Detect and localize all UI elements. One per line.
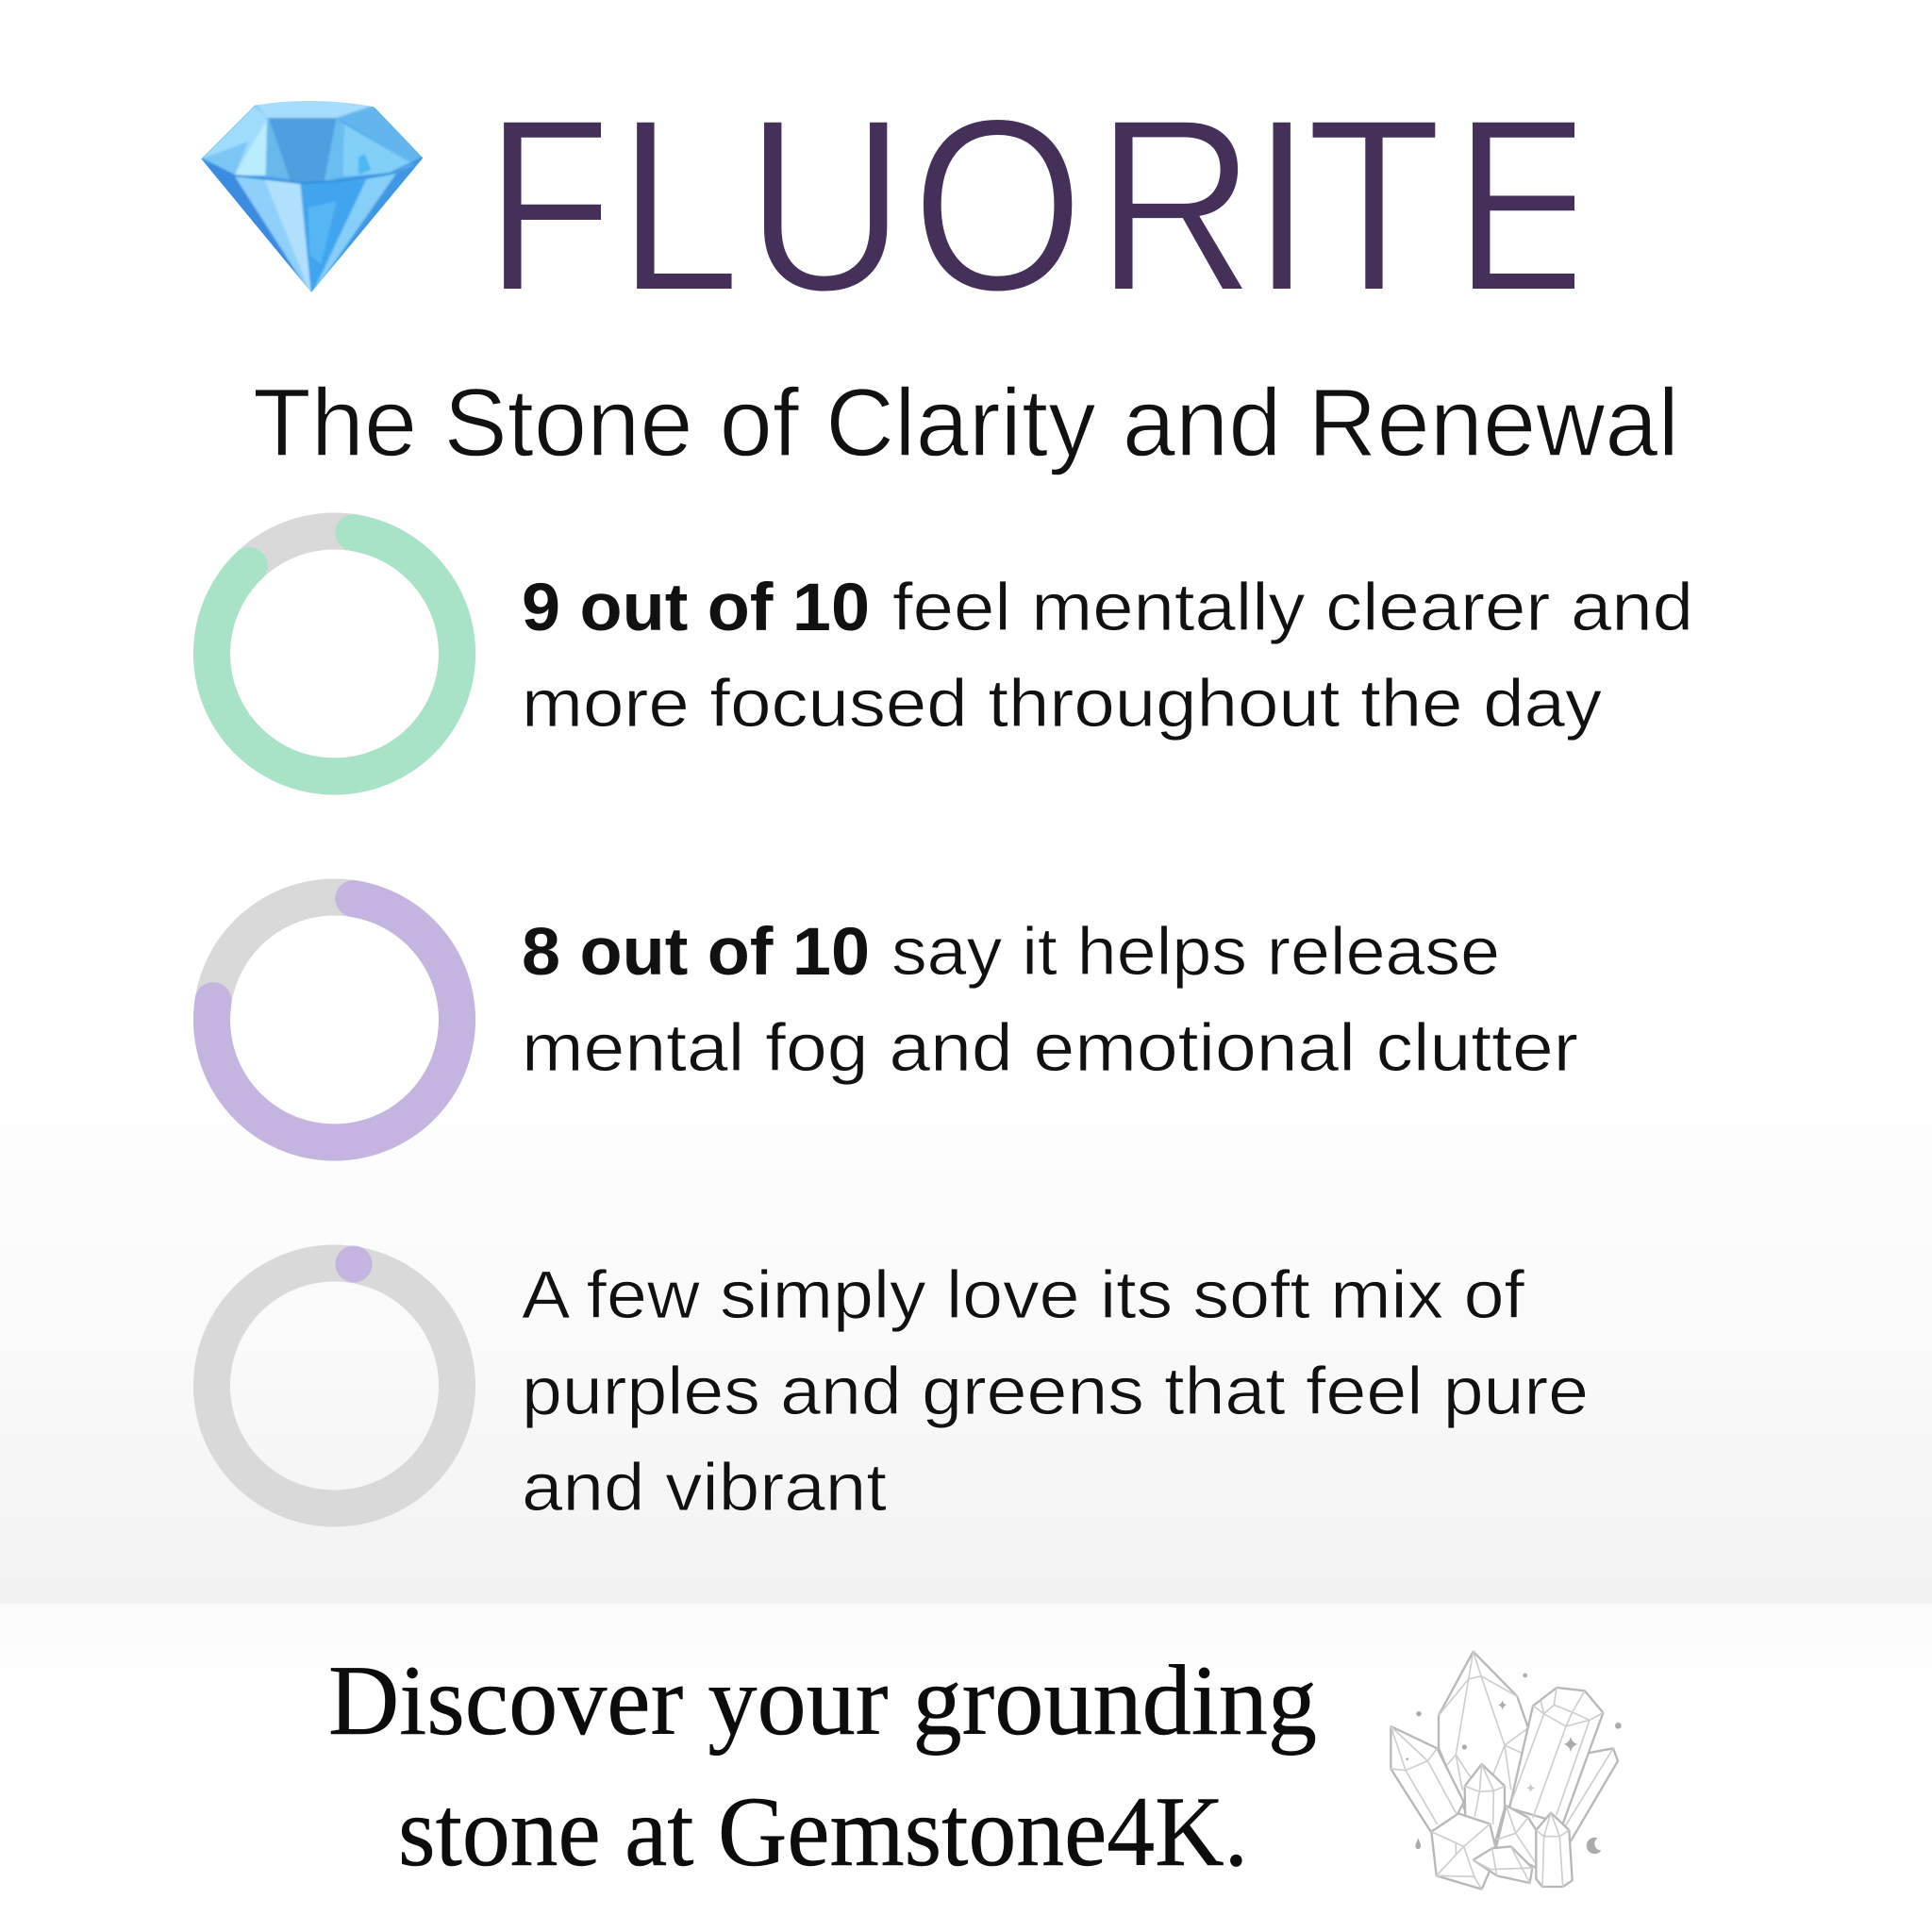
stat text: 8 out of 10: mental fog and emotional clutter: [522, 1011, 1578, 1086]
donut chart: 8 out of 10: [211, 897, 458, 1142]
subtitle: The Stone of Clarity and Renewal: [253, 369, 1679, 476]
call to action: stone at Gemstone4K.: [398, 1776, 1248, 1887]
donut chart: a few: [211, 1245, 457, 1508]
stat text: 8 out of 10: 8 out of 10: [522, 915, 870, 990]
call to action: [328, 1645, 1317, 1887]
icon: crystal cluster: [1391, 1652, 1622, 1890]
stat text: 9 out of 10: [522, 571, 1693, 741]
stat text: 8 out of 10: say it helps release: [891, 915, 1500, 990]
stat text: 9 out of 10: 9 out of 10: [522, 571, 870, 645]
stat text: 9 out of 10: more focused throughout the day: [522, 667, 1603, 741]
stat text: a few: purples and greens that feel pure: [522, 1355, 1589, 1429]
stat text: a few: [522, 1258, 1589, 1525]
stat text: a few: A few simply love its soft mix of: [522, 1258, 1524, 1333]
title: FLUORITE: [484, 66, 1601, 343]
call to action: Discover your grounding: [328, 1645, 1317, 1756]
stat text: 9 out of 10: feel mentally clearer and: [892, 571, 1693, 645]
donut chart: 9 out of 10: [211, 531, 458, 776]
stat text: a few: and vibrant: [522, 1451, 887, 1525]
icon: blue diamond: [202, 101, 423, 292]
stat text: 8 out of 10: [522, 915, 1578, 1086]
